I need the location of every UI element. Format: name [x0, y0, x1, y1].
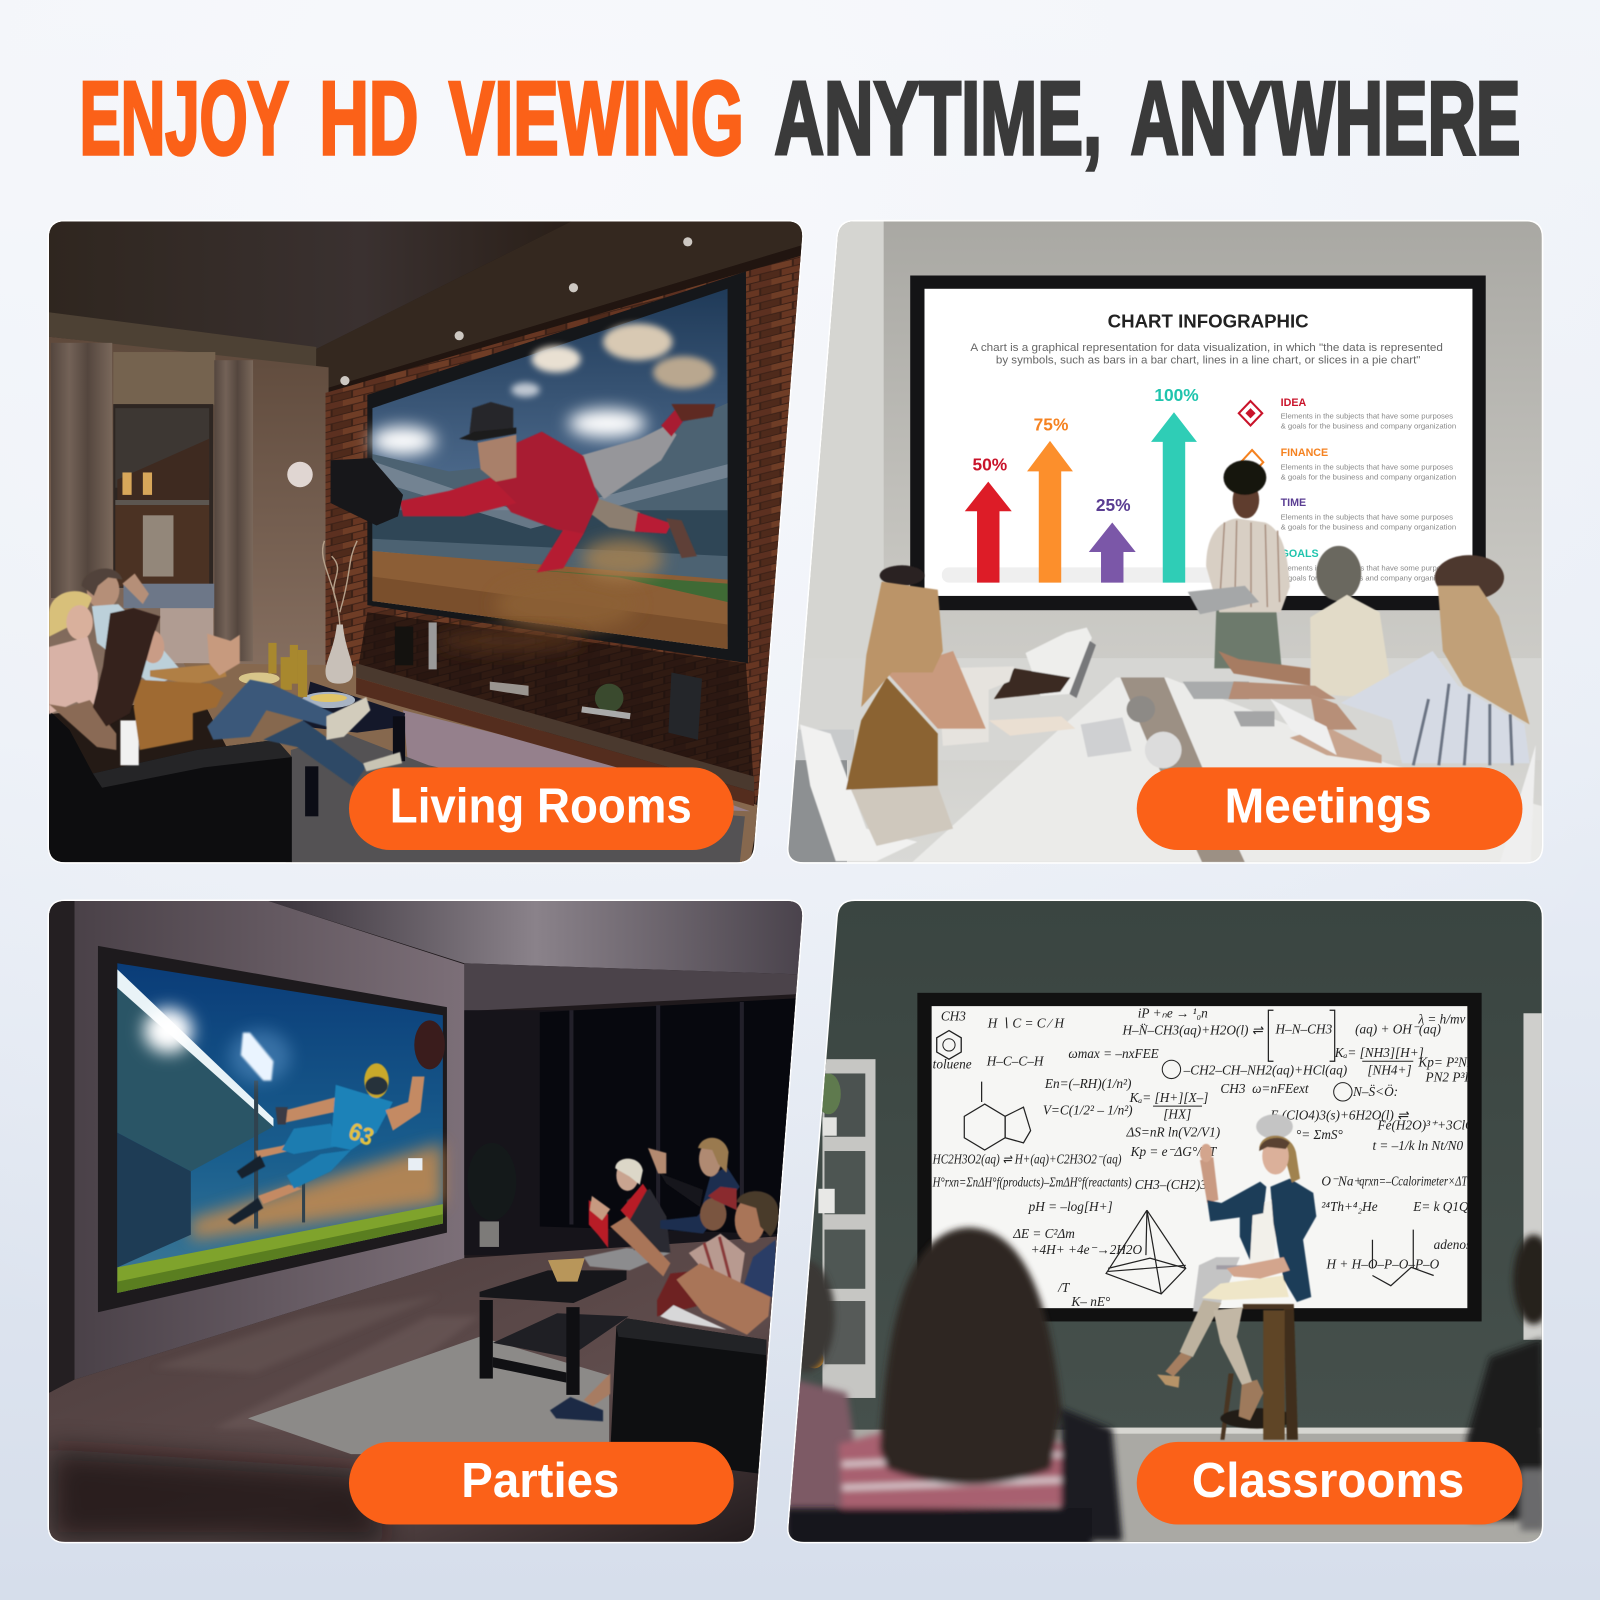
legend: finance	[1281, 447, 1456, 482]
title word: HD: HD	[319, 61, 418, 177]
legend: time: Elements in the subjects that have some purposes	[1281, 512, 1453, 521]
label pill: parties: Parties	[461, 1454, 619, 1508]
panel: living rooms	[49, 221, 804, 862]
formulas: CH3	[941, 1008, 966, 1023]
back wall	[49, 337, 329, 714]
legend: idea: Elements in the subjects that have some purposes	[1281, 411, 1453, 420]
title word: ENJOY: ENJOY	[80, 61, 289, 177]
title word: VIEWING: VIEWING	[449, 61, 744, 177]
white top	[1250, 1197, 1280, 1263]
audience	[49, 569, 402, 787]
formulas: [NH4+]	[1367, 1062, 1412, 1077]
label pill: parties	[349, 1442, 734, 1524]
arrow: 25% purple: 25%	[1096, 495, 1131, 515]
formulas: Kp = e⁻ΔG°/RT	[1130, 1144, 1218, 1159]
legs	[1165, 1352, 1192, 1377]
formulas: –CH2–CH–NH2(aq)+HCl(aq)	[1183, 1062, 1347, 1077]
audience centre	[786, 1228, 1122, 1549]
arrow: 100% teal: 100%	[1154, 385, 1199, 405]
icon: idea diamond	[1239, 401, 1262, 426]
formulas: O⁻Na+	[1321, 1174, 1362, 1189]
formulas: PN2 P³H2	[1425, 1070, 1481, 1085]
photo: party scene	[49, 901, 804, 1542]
chart baseline bar	[942, 568, 1210, 582]
conference table	[912, 678, 1542, 862]
floor	[184, 663, 760, 862]
formulas: H + H–O–P–O–P–O	[1326, 1256, 1440, 1271]
clouds	[511, 323, 714, 397]
legend: idea	[1281, 397, 1456, 431]
small speaker	[395, 627, 413, 665]
formulas: /T	[1057, 1280, 1071, 1295]
floor	[786, 1430, 1546, 1544]
back window wall	[464, 1010, 801, 1255]
man behind	[82, 569, 184, 686]
window	[113, 404, 215, 608]
brunette woman	[93, 608, 240, 750]
tablet and hands	[1216, 1265, 1266, 1269]
curtains	[51, 343, 112, 598]
floor	[49, 1235, 803, 1542]
couch	[610, 1318, 766, 1474]
audience left	[778, 1260, 867, 1531]
left bookshelf	[805, 1059, 876, 1398]
coffee table with snacks	[480, 1258, 629, 1395]
person with laptop	[880, 565, 1096, 746]
formulas: H ∖ C = C ∕ H	[987, 1016, 1065, 1031]
formulas: H–C–C–H	[986, 1053, 1045, 1068]
legend: goals: & goals for the business and company organization	[1281, 574, 1456, 583]
ceiling	[268, 901, 803, 974]
radiator and floor	[786, 730, 854, 862]
formulas: λ = h/mv	[1417, 1011, 1466, 1026]
formulas: °= ΣmS°	[1296, 1127, 1344, 1142]
couch	[49, 710, 292, 862]
display screen	[910, 276, 1486, 610]
raised arm	[1200, 1157, 1218, 1203]
formulas: K– nE°	[1070, 1294, 1111, 1309]
molecule diagrams	[964, 1082, 1434, 1294]
arrow: 75% orange	[1027, 415, 1073, 583]
legend: goals: Elements in the subjects that have some purposes	[1281, 563, 1453, 572]
arrow: 75% orange: 75%	[1034, 415, 1068, 435]
formulas: [HX]	[1163, 1106, 1191, 1121]
fans watching	[550, 1138, 779, 1421]
fan: front	[660, 1191, 779, 1335]
photo: meeting room scene	[786, 221, 1546, 864]
legend: finance: & goals for the business and company organization	[1281, 473, 1456, 482]
football player	[228, 1063, 424, 1224]
formulas: CH3 ω=nFEext	[1220, 1081, 1309, 1096]
label pill: meetings	[1137, 767, 1522, 850]
label pill: living rooms	[349, 767, 734, 850]
grass	[117, 1204, 443, 1293]
rug	[291, 734, 745, 862]
fan: white haired	[584, 1159, 670, 1270]
baseball player	[400, 402, 715, 572]
decorative twigs	[323, 541, 357, 624]
formulas: ΔE = C²Δm	[1012, 1226, 1075, 1241]
side wall	[74, 901, 464, 1380]
left seated woman	[800, 582, 986, 861]
title	[80, 61, 1520, 177]
formulas: En=(–RH)(1/n²)	[1044, 1076, 1131, 1091]
wall shelf	[356, 663, 754, 806]
legend: goals: GOALS	[1281, 548, 1319, 560]
formulas: Kₐ= [NH3][H+]	[1334, 1045, 1424, 1060]
skirt	[1202, 1276, 1289, 1300]
rug	[248, 1337, 609, 1454]
chart title: CHART INFOGRAPHIC	[1108, 311, 1309, 332]
legend: idea: & goals for the business and company organization	[1281, 422, 1456, 431]
legend: time: & goals for the business and company organization	[1281, 523, 1456, 532]
blonde woman	[49, 591, 98, 714]
legend: finance: Elements in the subjects that have some purposes	[1281, 462, 1453, 471]
baseball	[287, 462, 313, 487]
formulas: HC2H3O2(aq) ⇌ H+(aq)+C2H3O2⁻(aq)	[932, 1151, 1121, 1166]
stadium	[372, 403, 728, 582]
formulas: +4H+ +4e⁻→2H2O	[1031, 1242, 1143, 1257]
football player: 63	[345, 1118, 377, 1152]
formulas	[932, 1005, 1510, 1309]
football	[414, 1020, 445, 1069]
legend: time: TIME	[1281, 497, 1306, 509]
blazer	[1207, 1182, 1266, 1221]
audience right	[1466, 1235, 1554, 1531]
whiteboard screen	[917, 993, 1510, 1321]
head	[1259, 1135, 1300, 1183]
label pill: living rooms: Living Rooms	[390, 779, 692, 833]
formulas: pH = –log[H+]	[1028, 1199, 1113, 1214]
formulas: Kₐ= [H+][X–]	[1129, 1090, 1208, 1105]
field	[372, 551, 728, 649]
label pill: meetings: Meetings	[1224, 779, 1432, 833]
right bookshelf	[1523, 1013, 1544, 1340]
formulas: (aq) + OH⁻(aq)	[1355, 1022, 1441, 1037]
arrow: 25% purple	[1089, 495, 1136, 583]
chart description	[970, 342, 1443, 366]
legend: idea: IDEA	[1281, 397, 1306, 409]
photo: classroom scene	[778, 901, 1554, 1549]
coffee table	[239, 672, 405, 816]
fan's legs and shoe	[550, 1373, 610, 1421]
formulas: H–N̈–CH3(aq)+H2O(l) ⇌	[1121, 1023, 1264, 1038]
formulas: CH3–(CH2)3	[1135, 1177, 1207, 1192]
formulas: H–N–CH3	[1275, 1022, 1333, 1037]
chart description: by symbols, such as bars in a bar chart, lines in a line chart, or slices in a pie chart"	[996, 354, 1420, 366]
formulas: t = –1/k ln Nt/N0	[1372, 1138, 1463, 1153]
figurine	[429, 622, 437, 669]
legend: goals	[1281, 548, 1456, 583]
panel: classrooms	[778, 901, 1554, 1549]
stadium roof	[117, 983, 273, 1171]
legend: time	[1281, 497, 1456, 532]
projection screen	[367, 271, 748, 663]
formulas: N–S̈<Ö:	[1352, 1084, 1398, 1099]
dust cloud	[495, 578, 638, 631]
formulas: adenos	[1434, 1237, 1471, 1252]
formulas: Fe(H2O)³⁺+3ClO4⁻(aq)	[1377, 1118, 1510, 1133]
presenter	[1188, 460, 1290, 668]
arrow: 100% teal	[1151, 385, 1199, 583]
vase	[326, 624, 353, 684]
formulas: E (ClO4)3(s)+6H2O(l) ⇌	[1269, 1107, 1409, 1122]
floodlight pole	[230, 1030, 422, 1229]
man on right	[1218, 546, 1393, 699]
houseplant	[467, 1143, 516, 1247]
fan: red cap	[610, 1187, 745, 1316]
ceiling	[49, 221, 571, 349]
photo: living room scene	[49, 221, 804, 862]
panel: meetings	[786, 221, 1546, 864]
chart description: A chart is a graphical representation for data visualization, in which "the data is represented	[970, 342, 1443, 354]
panel: parties	[49, 901, 804, 1542]
formulas: H°rxn=ΣnΔH°f(products)–ΣmΔH°f(reactants)	[932, 1175, 1132, 1190]
stool	[1220, 1304, 1298, 1440]
formulas: qrxn=–Ccalorimeter×ΔT	[1359, 1174, 1469, 1189]
man's arm with remote	[49, 700, 139, 765]
bottles	[268, 643, 307, 697]
formulas: ²⁴Th+⁴₂He	[1321, 1199, 1378, 1214]
formulas: ωmax = –nxFEE	[1068, 1046, 1159, 1061]
arrow: 50% red	[965, 454, 1012, 583]
sunset band	[191, 1143, 443, 1240]
formulas: toluene	[933, 1056, 972, 1071]
jeans and sneakers	[207, 680, 402, 787]
icon: finance diamond	[1241, 450, 1263, 474]
formulas: E= k Q1Q2/d	[1412, 1199, 1486, 1214]
formulas: ΔS=nR ln(V2/V1)	[1126, 1125, 1220, 1140]
formulas: iP +ₙe → ¹₀n	[1138, 1005, 1208, 1020]
screen shadow behind presenter	[1193, 1114, 1293, 1313]
legend: finance: FINANCE	[1281, 447, 1328, 459]
label pill: classrooms	[1137, 1442, 1522, 1524]
label pill: classrooms: Classrooms	[1192, 1454, 1464, 1508]
formulas: V=C(1/2² – 1/n²)	[1043, 1102, 1133, 1117]
presenter on stool	[1157, 1114, 1316, 1440]
formulas: Kp= P²NH3	[1417, 1054, 1484, 1069]
projection screen	[98, 946, 447, 1312]
arrow: 50% red: 50%	[972, 454, 1007, 474]
glove	[331, 458, 403, 526]
dark floor vignette	[49, 1449, 388, 1542]
shelf items	[490, 682, 529, 696]
tall speaker	[668, 672, 702, 740]
title word: ANYTIME,: ANYTIME,	[774, 61, 1102, 177]
brick wall	[326, 255, 803, 806]
fan: blond navy shirt	[648, 1138, 740, 1234]
woman on right	[1270, 555, 1536, 862]
